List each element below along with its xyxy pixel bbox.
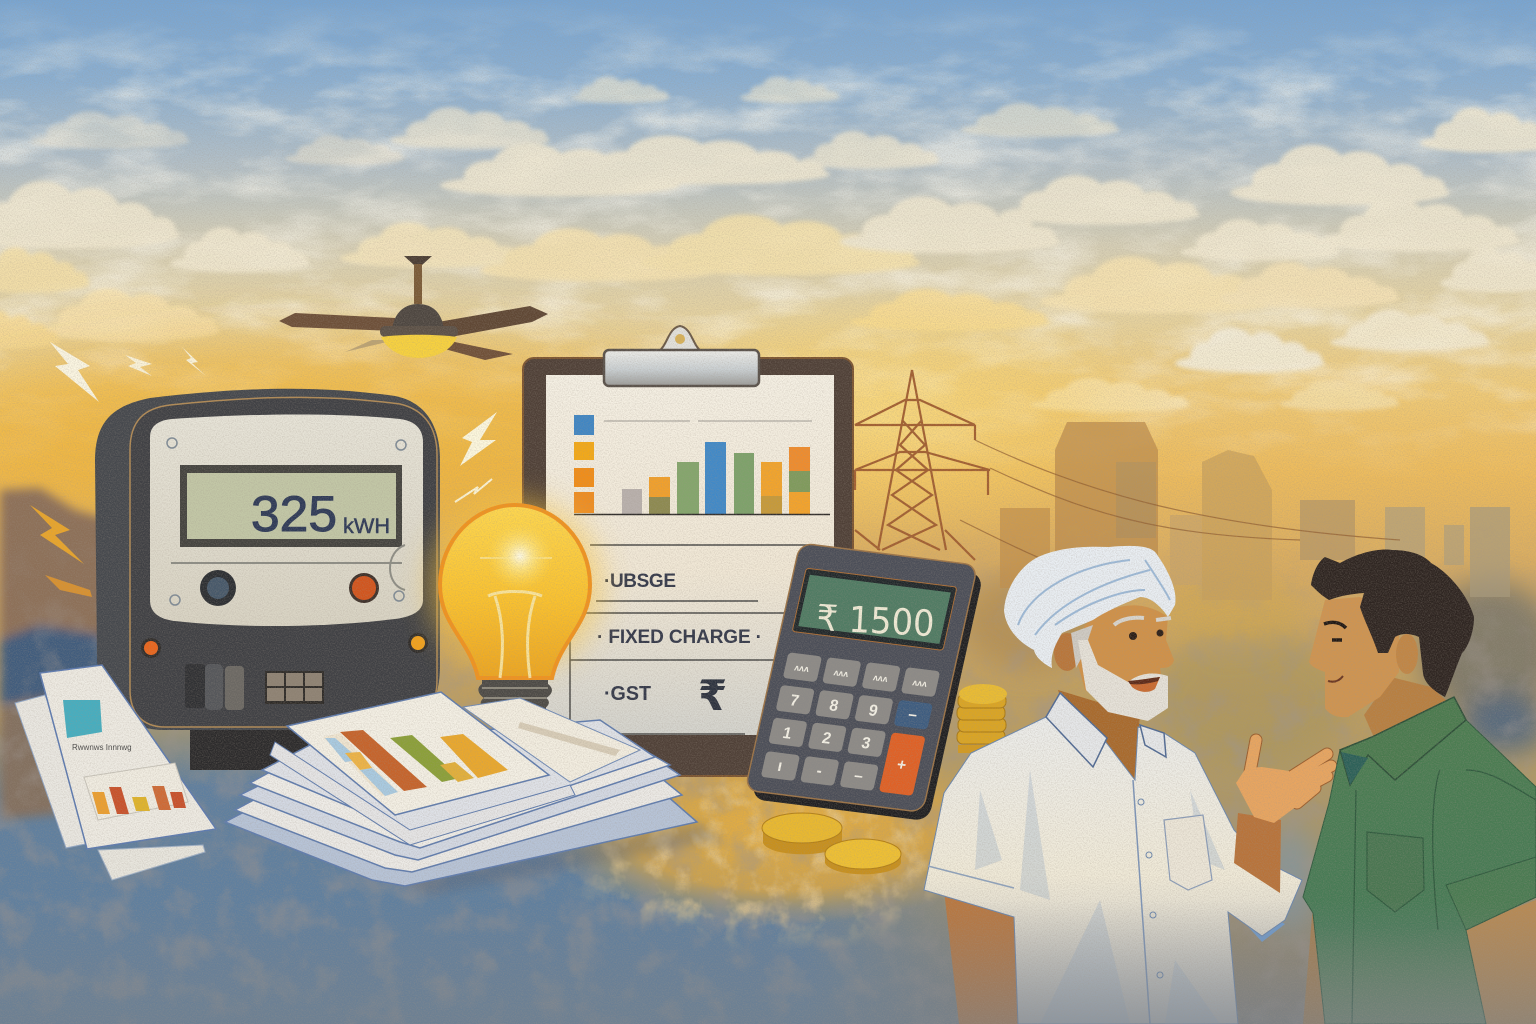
calculator display frame bbox=[792, 568, 957, 650]
neck bbox=[1364, 677, 1448, 742]
calculator side bbox=[751, 552, 984, 821]
calculator keys: – bbox=[907, 706, 919, 724]
lower sheets bbox=[225, 720, 697, 886]
bulb glass bbox=[440, 505, 590, 678]
face bbox=[1074, 605, 1174, 712]
bulb core bbox=[486, 522, 554, 590]
calculator keys: ᴧᴧᴧ bbox=[833, 667, 849, 679]
flat coins bbox=[762, 813, 901, 874]
green shirt bbox=[1303, 697, 1536, 1024]
ear bbox=[1054, 633, 1080, 671]
ground left bbox=[0, 640, 1000, 1024]
left bill papers bbox=[15, 665, 216, 880]
label usage: ·UBSGE bbox=[604, 571, 676, 592]
paper behind bbox=[15, 695, 105, 848]
calculator keys: ᴧᴧᴧ bbox=[912, 677, 928, 689]
calculator display bbox=[798, 575, 951, 644]
right sheet bbox=[463, 698, 640, 782]
meter rim bbox=[130, 397, 437, 727]
right arm bbox=[1466, 900, 1536, 1024]
raised hand bbox=[1236, 740, 1331, 823]
beard bbox=[1078, 640, 1168, 721]
calculator keys: 7 bbox=[788, 692, 801, 710]
calculator keys: 1 bbox=[781, 725, 793, 743]
calculator bbox=[743, 543, 985, 821]
reading 325: 325 bbox=[251, 486, 337, 542]
clip bbox=[604, 326, 759, 386]
fan light bbox=[381, 335, 457, 358]
clipboard board bbox=[523, 358, 853, 776]
switches bbox=[185, 664, 244, 710]
rupee symbol: ₹ bbox=[698, 671, 727, 720]
lightning bolts bbox=[30, 342, 497, 597]
mini chart bbox=[84, 763, 188, 820]
young man in green shirt bbox=[1303, 550, 1536, 1024]
clouds bbox=[0, 77, 1536, 412]
paper main bbox=[40, 665, 216, 849]
left arm bbox=[944, 890, 1030, 1024]
fan mount bbox=[404, 256, 432, 265]
eye and brow bbox=[1324, 622, 1346, 640]
transmission tower bbox=[855, 370, 990, 560]
fan blades bbox=[279, 313, 395, 331]
left arm bbox=[1303, 905, 1327, 1024]
face bbox=[1309, 597, 1399, 717]
electricity meter bbox=[95, 389, 440, 770]
form lines bbox=[570, 545, 815, 734]
left sleeve cuff line bbox=[928, 866, 1014, 888]
meter face bbox=[150, 414, 423, 626]
placket line bbox=[1352, 770, 1536, 1024]
calculator keys: 8 bbox=[828, 697, 840, 715]
ceiling fan bbox=[279, 256, 548, 360]
display amount: ₹ 1500 bbox=[816, 598, 936, 645]
top sheet chart bbox=[323, 730, 508, 796]
top sheet bbox=[287, 692, 549, 815]
shirt pocket bbox=[1164, 815, 1212, 890]
palm bbox=[1236, 767, 1301, 823]
indicator lights bbox=[141, 638, 161, 658]
pocket bbox=[1367, 832, 1424, 912]
ground speckle bbox=[0, 586, 1536, 1023]
neck bbox=[1058, 690, 1140, 780]
chart legend bbox=[574, 415, 594, 513]
older man in turban bbox=[924, 546, 1331, 1024]
meter stand bbox=[190, 700, 370, 770]
forearm bbox=[1234, 813, 1281, 893]
paper stack bbox=[225, 692, 720, 895]
calculator keys: 9 bbox=[867, 702, 879, 720]
fan hub bbox=[392, 304, 444, 330]
smile bbox=[1328, 676, 1343, 682]
keypad bbox=[265, 671, 324, 704]
stack shadow bbox=[400, 822, 720, 895]
bulb base bbox=[478, 678, 552, 710]
glowing bulb bbox=[427, 497, 603, 710]
grey side hair bbox=[1071, 625, 1093, 668]
dark knob bbox=[200, 570, 236, 606]
collar bbox=[1340, 697, 1466, 785]
small heading: Rwwnws Innnwg bbox=[72, 743, 132, 752]
calculator keys: + bbox=[895, 756, 908, 775]
bulb filament bbox=[480, 558, 552, 678]
power lines bbox=[960, 440, 1400, 590]
hair bbox=[1311, 550, 1474, 697]
orange knob bbox=[349, 573, 379, 603]
calculator keys: – bbox=[852, 767, 865, 785]
city skyline bbox=[1000, 422, 1510, 600]
label gst: ·GST bbox=[604, 683, 651, 705]
calculator keys: ᴧᴧᴧ bbox=[793, 662, 810, 674]
calculator body bbox=[745, 543, 978, 812]
calculator keys: ı bbox=[776, 758, 784, 775]
clipboard paper bbox=[546, 375, 834, 735]
trees right bbox=[960, 570, 1536, 935]
bottom haze bbox=[0, 900, 1536, 1024]
mottled cloud texture bbox=[0, 0, 1536, 480]
central glow bbox=[580, 290, 1180, 550]
calculator keys: 3 bbox=[860, 735, 872, 753]
turban bbox=[1004, 546, 1176, 668]
lcd frame bbox=[180, 465, 402, 547]
meter divider bbox=[171, 545, 405, 590]
calculator keys: 2 bbox=[820, 730, 833, 748]
sleeve underside bbox=[1215, 890, 1285, 942]
shirt collar bbox=[1046, 693, 1166, 767]
label fixed charge: · FIXED CHARGE · bbox=[597, 627, 762, 648]
bar chart bbox=[574, 415, 830, 514]
ground gold speckle bbox=[564, 777, 934, 948]
bulb halo bbox=[427, 497, 603, 673]
eyebrows bbox=[1114, 618, 1171, 625]
mouth bbox=[1128, 677, 1160, 692]
calculator keys: ᴧᴧᴧ bbox=[872, 672, 889, 684]
white shirt bbox=[924, 693, 1302, 1024]
calculator keys bbox=[761, 652, 940, 796]
coin stack bbox=[957, 684, 1007, 753]
lcd screen bbox=[187, 473, 396, 539]
unit kWH: kWH bbox=[343, 515, 390, 538]
sleeve cuff bbox=[1446, 857, 1536, 930]
shirt folds bbox=[975, 770, 1225, 1024]
turban folds bbox=[1018, 560, 1170, 635]
sunset glow bbox=[0, 345, 730, 535]
shirt placket and buttons bbox=[1133, 780, 1163, 1024]
clipboard bbox=[523, 326, 853, 776]
meter body bbox=[95, 389, 440, 730]
ground golden patch bbox=[540, 725, 1020, 925]
hills left bbox=[0, 488, 130, 820]
fingers bbox=[1250, 740, 1331, 803]
ear bbox=[1396, 634, 1418, 674]
eyes bbox=[1129, 630, 1164, 640]
teal icon bbox=[63, 700, 102, 738]
meter screw details bbox=[167, 438, 406, 605]
calculator keys: - bbox=[815, 763, 824, 780]
paper under bbox=[98, 845, 205, 880]
